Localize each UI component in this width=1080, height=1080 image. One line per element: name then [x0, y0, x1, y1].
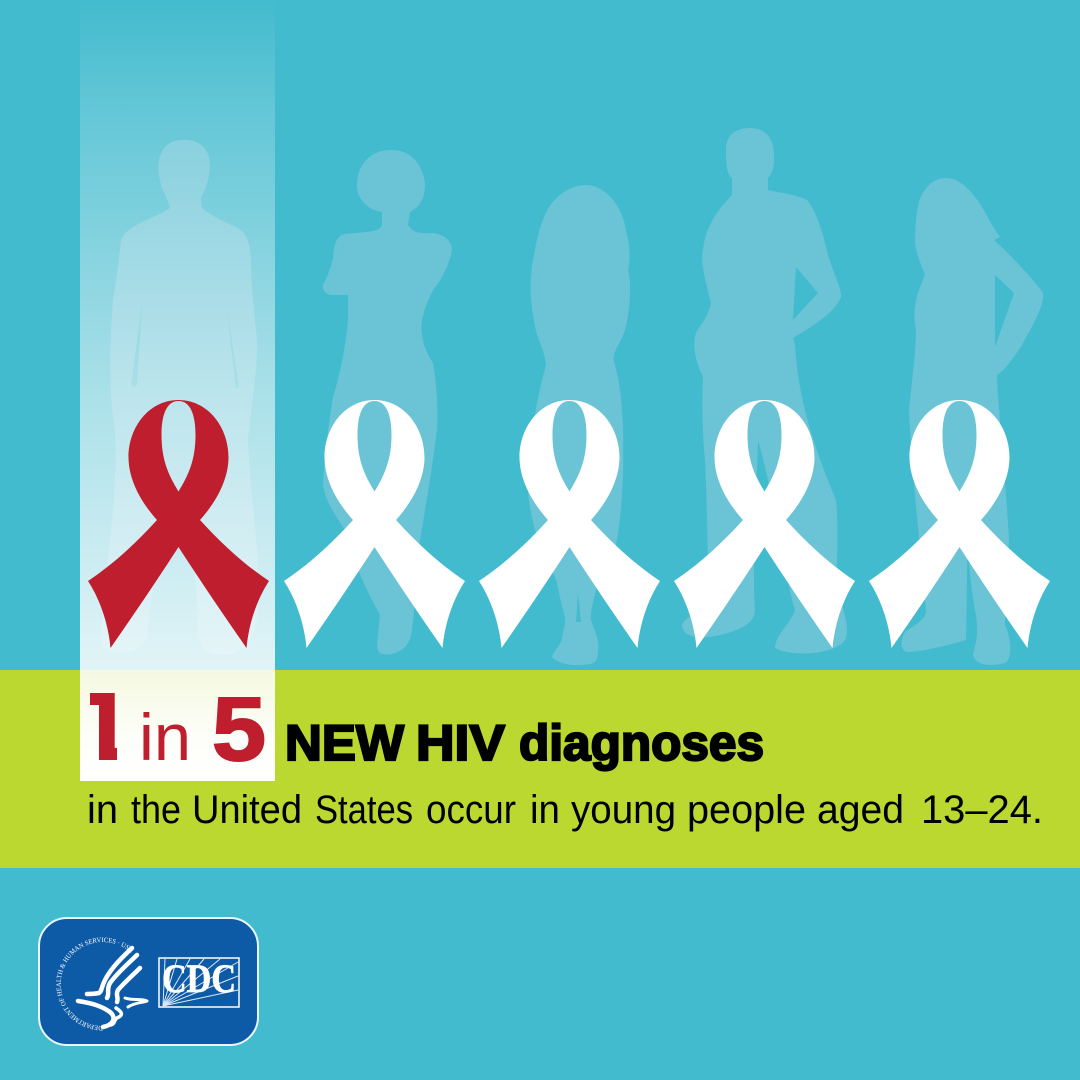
green banner [0, 670, 1080, 868]
silhouette: woman 2 [323, 150, 452, 654]
subheading line: occur [426, 788, 516, 832]
subheading line [87, 788, 1043, 832]
subheading line: States [315, 788, 413, 832]
subheading line: aged [817, 788, 904, 832]
logo panel [38, 917, 259, 1046]
silhouette: woman 5 [902, 178, 1043, 665]
red ribbon [88, 400, 269, 648]
subheading line: people [687, 788, 806, 832]
heading: NEW HIV diagnoses: diagnoses [519, 715, 764, 771]
heading: NEW HIV diagnoses [285, 715, 764, 771]
statistic: 1 in 5: 1 [77, 675, 130, 781]
HHS seal text: DEPARTMENT OF HEALTH & HUMAN SERVICES · USA [56, 938, 132, 1031]
silhouette: man 4 [682, 128, 847, 653]
silhouette: woman 3 [528, 185, 630, 665]
white ribbon 4 [674, 400, 855, 648]
white ribbon 5 [869, 400, 1050, 648]
statistic: 1 in 5: in [139, 700, 191, 774]
CDC logo: CDC [162, 956, 236, 1001]
silhouette: man 1 [102, 140, 259, 655]
silhouettes of five young people [102, 128, 1043, 665]
highlight column [80, 0, 275, 781]
icon: HHS eagle [78, 948, 147, 1027]
heading: NEW HIV diagnoses: HIV [416, 715, 506, 771]
white ribbon 2 [284, 400, 465, 648]
subheading line: the [131, 788, 181, 832]
heading: NEW HIV diagnoses: NEW [285, 715, 405, 771]
subheading line: in [530, 788, 560, 832]
white ribbon 3 [479, 400, 660, 648]
subheading line: young [571, 788, 676, 832]
ribbons [88, 400, 1050, 648]
statistic: 1 in 5 [90, 693, 264, 762]
subheading line: in [87, 788, 118, 832]
subheading line: 13–24. [921, 788, 1043, 832]
subheading line: United [192, 788, 302, 832]
statistic: 1 in 5: 5 [212, 680, 266, 780]
